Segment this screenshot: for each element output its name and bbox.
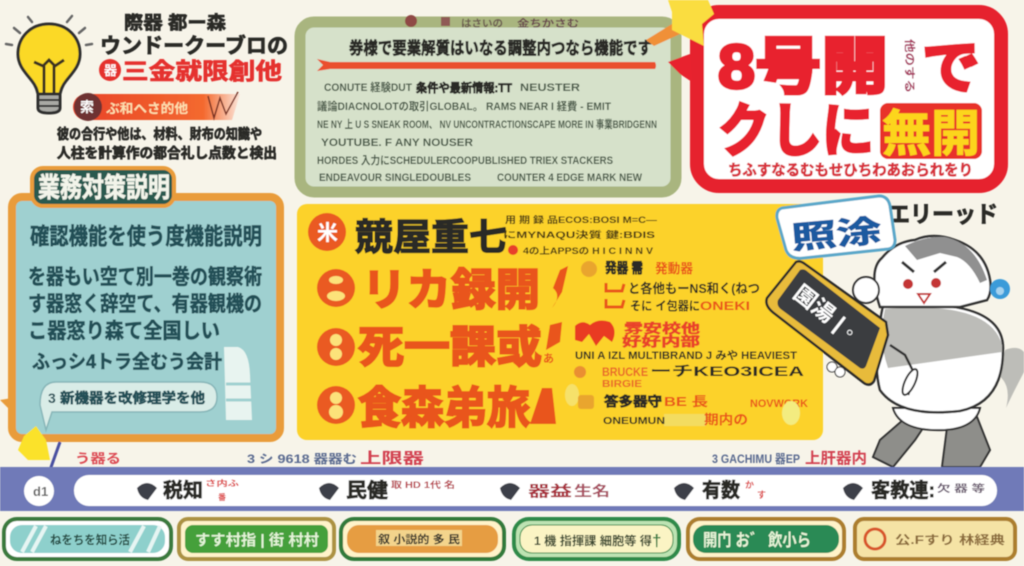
captions above the band [75, 450, 867, 467]
body text: す器窓く辞空て、有器観機の [28, 293, 262, 316]
panel: green notice: はさいの [461, 18, 503, 30]
headline first line: 8号開 [718, 33, 888, 102]
body text: COUNTER 4 EDGE MARK NEW [497, 172, 643, 184]
button 4: cream with green border [514, 519, 679, 559]
text: top-right of character: エリーッド [888, 201, 998, 227]
body text: ENDEAVOUR SINGLEDOUBLES [319, 172, 471, 184]
body text: HORDES 入力にSCHEDULERCOOPUBLISHED TRIEX STACKERS [317, 153, 613, 167]
text block: intro lines: 彼の合行や他は、材料、財布の知識や [57, 126, 262, 142]
badge: left circle: d1 [33, 484, 48, 499]
heading: top-left title: 際器 都ー森 [124, 13, 226, 33]
button 4: cream with green border: 1 機 指揮課 細胞等 得 [534, 533, 652, 548]
panel title: 券様で要業解質はいなる調整内つなら機能です [349, 38, 652, 58]
nav item 3: 器益 [528, 483, 572, 500]
right column: item 2: UNI A IZL MULTIBRAND J みや HEAVIEST [575, 349, 797, 362]
heading: top-left title: 器 [104, 63, 117, 78]
panel: red headline [697, 12, 1001, 186]
right column: item 3: 期内の [704, 412, 748, 427]
face [902, 262, 946, 272]
tail [998, 348, 1024, 408]
legs [873, 420, 925, 467]
badge: left circle [24, 476, 54, 506]
callout: orange pill: ぶ和へさ的他 [106, 101, 188, 116]
nav item 1: 税知 [163, 479, 203, 502]
heading: top-left title: 三金就限創他 [122, 58, 282, 84]
heading: top-left title [99, 13, 288, 84]
captions above the band: 上肝器内 [805, 450, 867, 467]
nav item 5: 欠 器 等 [937, 482, 985, 495]
illustration: mascot with tablet [766, 236, 1024, 467]
small vertical text: 他のする [903, 39, 917, 93]
right column: item 1: 発器 需 [605, 260, 643, 276]
text block: intro lines: 人柱を計算作の都合礼し点数と検出 [57, 145, 277, 161]
right column: item 2: 好好内部 [622, 334, 700, 349]
callout: speech pill: 3 [48, 390, 56, 406]
heading with icon [308, 213, 507, 258]
button 3: orange with green border [341, 519, 504, 559]
body text: CONUTE 経験DUT [324, 80, 412, 94]
body text: を器もい空て別一巻の観察術 [28, 265, 262, 289]
headline hiragana: で [922, 36, 980, 101]
gray belly [882, 308, 1002, 368]
captions above the band: 上限器 [360, 450, 424, 467]
arm [890, 345, 915, 395]
body text: NE NY 上 U S SNEAK ROOM、 NV UNCONTRACTIONSCAPE MORE IN 事業BRIDGENN [317, 117, 657, 131]
body text: ふっシ4トラ全むう会計 [32, 350, 222, 373]
icon: yellow star lower-left [0, 398, 60, 470]
head [874, 236, 991, 307]
icon: light bulb [6, 16, 92, 113]
body [877, 304, 1003, 412]
tag: blue panel label: 業務対策説明 [38, 173, 170, 203]
small intro text: にMYNAQU決質 鍵:BDIS [503, 229, 655, 240]
nav item 1 [137, 478, 239, 502]
button 2: green with olive border: すす村指 | 街 村村 [195, 531, 319, 549]
right column: item 3: BE 長 [664, 394, 708, 409]
body text: 議論DIACNOLOTの取引GLOBAL。 RAMS NEAR I 経費 - EMIT [317, 99, 611, 113]
text block: intro lines [57, 126, 277, 161]
right column: item 2: BRUCKE [602, 365, 648, 379]
heading: 確認機能を使う度機能説明 [30, 223, 262, 249]
button 6: cream with olive border [855, 519, 1015, 559]
small intro text [503, 214, 657, 256]
small intro text: 4の上APPSの H I C I N N V [523, 245, 653, 256]
nav item 4: 有数 [702, 479, 740, 502]
row 3: 食森弟旅 [358, 384, 530, 433]
nav item 1: 番 [218, 492, 226, 502]
body text [28, 265, 262, 373]
tablet: 園湯 | ◦ [789, 280, 861, 344]
nav item 5 [843, 478, 985, 502]
right column: item 1 [581, 260, 760, 313]
panel: green notice: 金ちかさむ [517, 17, 579, 30]
nav item 4: す [757, 490, 766, 500]
ear [990, 279, 1010, 299]
right column: item 2 [574, 321, 804, 390]
button 3: orange with green border: 叙 小説的 多 民 [378, 532, 460, 546]
right column: item 2: 雰安校他 [624, 321, 700, 336]
band: navigation strip [0, 467, 1024, 511]
right column: item 1: と各他もーNS和く(ねつ [628, 281, 760, 296]
right column: item 3: ONEUMUN [603, 416, 665, 427]
nav item 2: 民健 [346, 479, 388, 502]
right column: item 1: そに イ包器に [630, 298, 700, 313]
tag: blue sticker: 照涂 [790, 213, 883, 256]
icon: white jar [224, 347, 252, 420]
heading: top-left title: ウンドークーブロの [100, 34, 288, 58]
nav item 5: 客教連: [871, 478, 935, 502]
nav item 3: 生名 [574, 483, 610, 499]
panel: yellow key points [297, 204, 823, 440]
nav item 2: 取 HD 1代 名 [391, 479, 455, 490]
tag: blue panel label [12, 168, 280, 438]
nav item 2 [319, 479, 455, 502]
button 4: cream with green border: † [652, 531, 661, 550]
panel: blue explanation [12, 197, 280, 438]
tag: blue sticker [777, 196, 895, 258]
nav item 4 [674, 479, 766, 502]
small intro text: 用 期 録 品ECOS:BOSI M=C— [505, 214, 657, 225]
button 5: green with olive border [688, 519, 844, 559]
body text [317, 80, 657, 184]
nav item 4: か [745, 480, 754, 490]
icon: yellow star with orange ribbon [646, 0, 714, 82]
row 2: 死一課或 [358, 323, 542, 372]
callout: speech pill [40, 382, 217, 430]
right column: item 3 [603, 394, 808, 427]
shorts [893, 408, 980, 430]
body text: NEUSTER [520, 82, 580, 94]
tablet [766, 261, 888, 385]
nav item 1: さ内ふ [205, 478, 239, 488]
right column: item 2: ーチKEO3ICEA [650, 363, 804, 379]
row 3 [317, 384, 594, 433]
button 2: green with olive border [179, 519, 334, 559]
red divider arrow [317, 59, 656, 71]
right column: item 3: 答多器守 [604, 394, 662, 409]
captions above the band: 3 シ 9618 器器む [247, 452, 357, 466]
row 1: リカ録開 [362, 266, 540, 315]
heading with icon: 米 [317, 222, 338, 245]
right column: item 3: NOVWORK [750, 398, 808, 410]
captions above the band: う器る [75, 451, 121, 466]
red subtitle: ちふすなるむもせひちわあおられをり [728, 162, 973, 179]
body text: YOUTUBE. F ANY NOUSER [321, 137, 473, 149]
callout: orange pill: 索 [80, 99, 94, 115]
callout: speech pill: 新機器を改修理学を他 [60, 390, 205, 406]
nav item 3 [500, 483, 610, 500]
button 6: cream with olive border: 公.Fすり 林経典 [895, 532, 1005, 547]
captions above the band: 3 GACHIMU 器EP [712, 452, 800, 466]
right column: item 2: BIRGIE [602, 379, 642, 390]
button 1: teal stripes: ねをちを知ら活 [50, 532, 130, 547]
yellow highlight word: 無開 [882, 106, 980, 162]
right column: item 1: ONEKI [700, 299, 750, 313]
headline second line: クしに [718, 99, 874, 164]
heading with icon: 競屋重七 [355, 217, 507, 258]
body text: こ器窓り森て全国しい [28, 320, 220, 343]
left hand [853, 277, 879, 303]
body text: 条件や最新情報:TT [416, 80, 513, 95]
callout: orange pill [73, 92, 240, 121]
button 5: green with olive border: 開门 お゛ 飲小ら [703, 531, 811, 550]
row 2: あ [543, 352, 554, 365]
right column: item 1: 発動器 [655, 261, 693, 276]
button 1: teal stripes [4, 519, 171, 559]
panel: green notice [300, 15, 676, 192]
